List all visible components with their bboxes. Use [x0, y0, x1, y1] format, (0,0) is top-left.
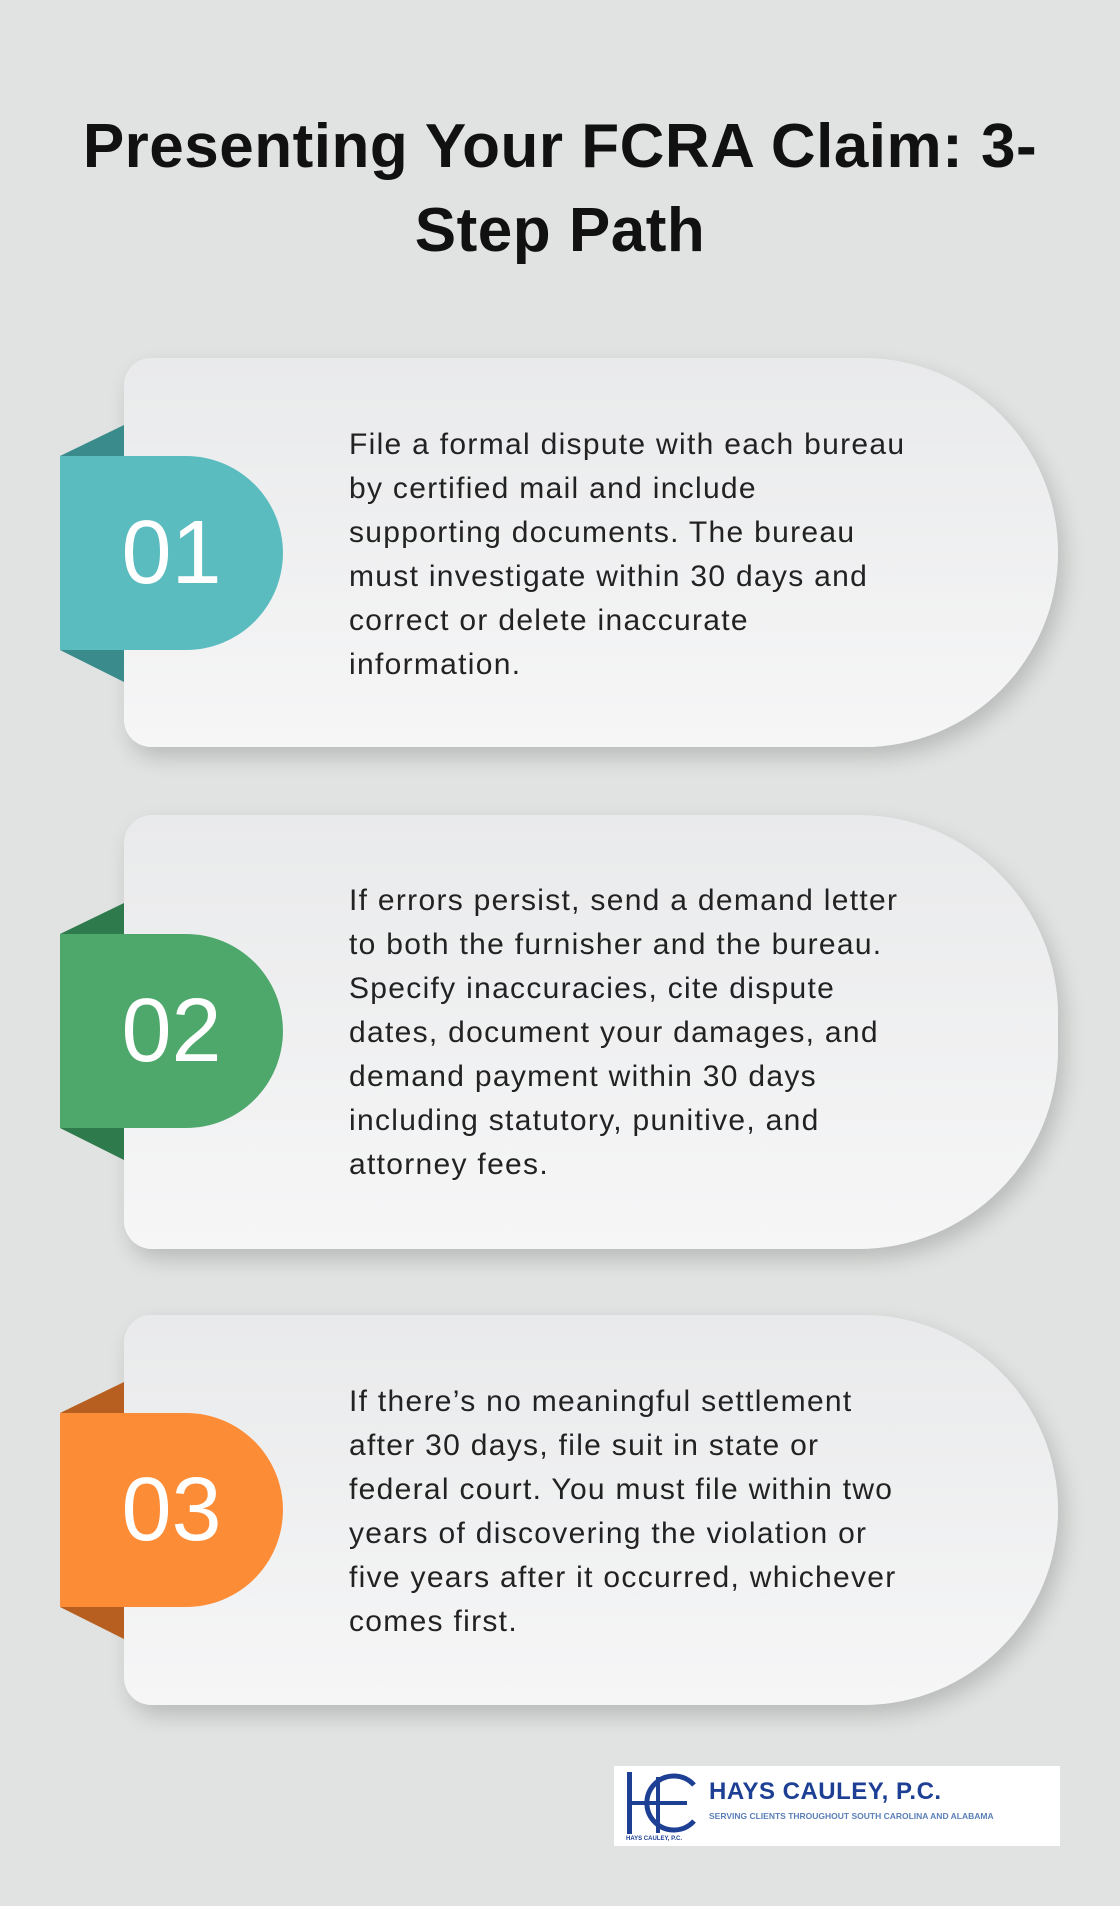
badge 3 — [60, 1382, 283, 1639]
badge 2 — [60, 903, 283, 1160]
text 1: must investigate within 30 days and — [349, 560, 868, 593]
logo: SERVING CLIENTS THROUGHOUT SOUTH CAROLINA AND ALABAMA — [709, 1811, 994, 1821]
card 3 — [124, 1315, 1058, 1705]
text 3: federal court. You must file within two — [349, 1473, 893, 1506]
title — [83, 112, 1037, 265]
number 01: 01 — [121, 503, 222, 603]
text 1: correct or delete inaccurate — [349, 604, 749, 637]
text 1: supporting documents. The bureau — [349, 516, 855, 549]
number 02: 02 — [121, 981, 222, 1081]
text 3: after 30 days, file suit in state or — [349, 1429, 819, 1462]
logo: HAYS CAULEY, P.C. — [709, 1778, 942, 1805]
text 2: including statutory, punitive, and — [349, 1104, 820, 1137]
text 1: information. — [349, 648, 521, 681]
panel: step 3 — [60, 1315, 1072, 1724]
number 03: 03 — [121, 1460, 222, 1560]
text 2: If errors persist, send a demand letter — [349, 884, 898, 917]
title: Presenting Your FCRA Claim: 3- — [83, 112, 1037, 181]
text 3: five years after it occurred, whichever — [349, 1561, 897, 1594]
text 1: by certified mail and include — [349, 472, 757, 505]
text 3: comes first. — [349, 1605, 518, 1638]
logo: HAYS CAULEY, P.C. — [626, 1836, 682, 1842]
text 3: If there’s no meaningful settlement — [349, 1385, 853, 1418]
text 2: to both the furnisher and the bureau. — [349, 928, 882, 961]
text 2 — [349, 884, 898, 1181]
card 2 — [124, 815, 1058, 1249]
text 1 — [349, 428, 905, 681]
text 3: years of discovering the violation or — [349, 1517, 867, 1550]
text 1: File a formal dispute with each bureau — [349, 428, 905, 461]
panel: step 1 — [60, 358, 1072, 766]
badge 1 — [60, 425, 283, 682]
panel: step 2 — [60, 815, 1072, 1268]
text 2: dates, document your damages, and — [349, 1016, 879, 1049]
text 2: Specify inaccuracies, cite dispute — [349, 972, 835, 1005]
text 2: attorney fees. — [349, 1148, 549, 1181]
logo mark — [627, 1772, 696, 1834]
text 2: demand payment within 30 days — [349, 1060, 817, 1093]
title: Step Path — [415, 196, 705, 265]
card 1 — [124, 358, 1058, 747]
text 3 — [349, 1385, 897, 1638]
logo — [614, 1766, 1060, 1846]
